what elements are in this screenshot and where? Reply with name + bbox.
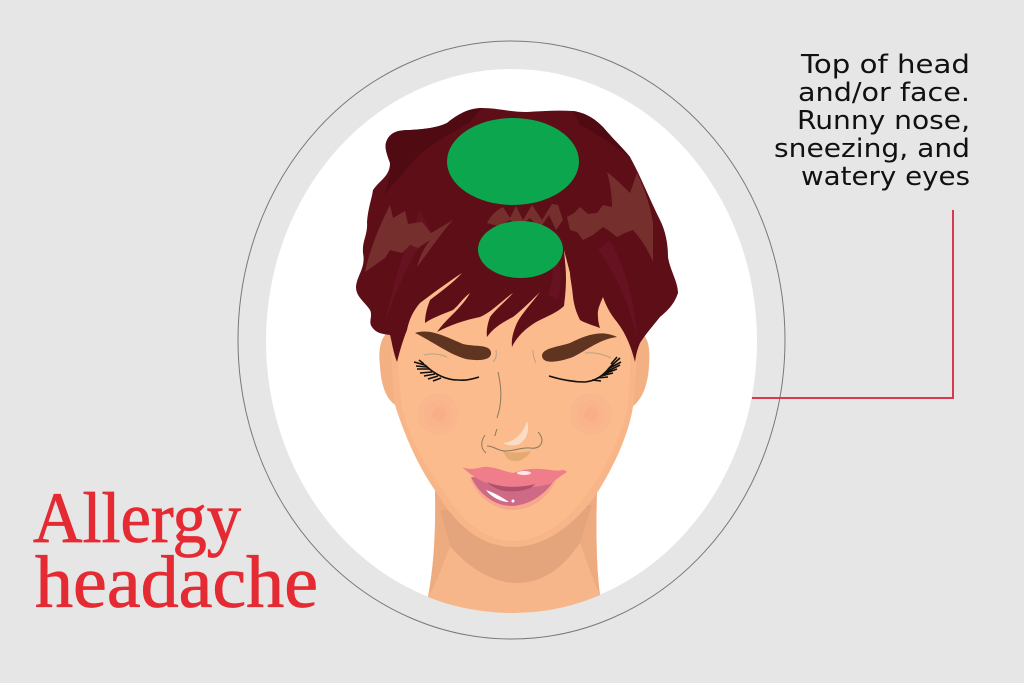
symptom description text: Top of head	[800, 50, 970, 80]
face shape	[391, 230, 637, 547]
hair highlight left	[365, 205, 453, 272]
pain area: forehead	[478, 221, 563, 278]
left eyebrow	[415, 332, 491, 360]
mouth parting	[487, 482, 535, 491]
symptom description text: watery eyes	[801, 162, 970, 192]
neck shadow under chin	[440, 505, 592, 583]
callout connector line	[752, 210, 953, 398]
neck side shading	[428, 490, 600, 597]
inner white oval	[266, 69, 757, 613]
hair highlight right	[567, 172, 653, 262]
face inner highlight	[397, 230, 631, 541]
cheek blush left	[417, 393, 459, 435]
lips	[462, 467, 567, 510]
hair highlight center	[487, 204, 563, 230]
nose under-shadow	[503, 451, 531, 461]
title: headache	[35, 542, 318, 624]
nose highlight	[503, 421, 528, 445]
symptom description text: sneezing, and	[774, 134, 970, 164]
ears	[379, 330, 649, 407]
cheek blush right	[570, 393, 612, 435]
outer thin oval outline	[238, 41, 785, 639]
upper lip	[462, 467, 567, 488]
right closed eye with lashes	[549, 357, 621, 382]
symptom description text	[774, 50, 970, 192]
nose lines	[482, 372, 542, 453]
lip gloss highlights	[486, 490, 509, 502]
hair	[356, 108, 678, 362]
symptom description text: Runny nose,	[797, 106, 970, 136]
illustration: woman's face	[356, 108, 678, 613]
right eyebrow	[542, 333, 617, 362]
brow creases and lid lines	[424, 350, 611, 363]
lower lip	[471, 477, 555, 506]
title	[33, 478, 318, 624]
hair lighter strands	[385, 210, 637, 340]
neck	[428, 480, 600, 613]
title: Allergy	[33, 478, 241, 558]
left closed eye with lashes	[414, 360, 479, 381]
symptom description text: and/or face.	[798, 78, 970, 108]
lip outer glow	[470, 478, 556, 510]
pain area: top of head	[447, 118, 579, 205]
nose	[482, 372, 542, 461]
hair darker crown shading	[385, 108, 630, 195]
